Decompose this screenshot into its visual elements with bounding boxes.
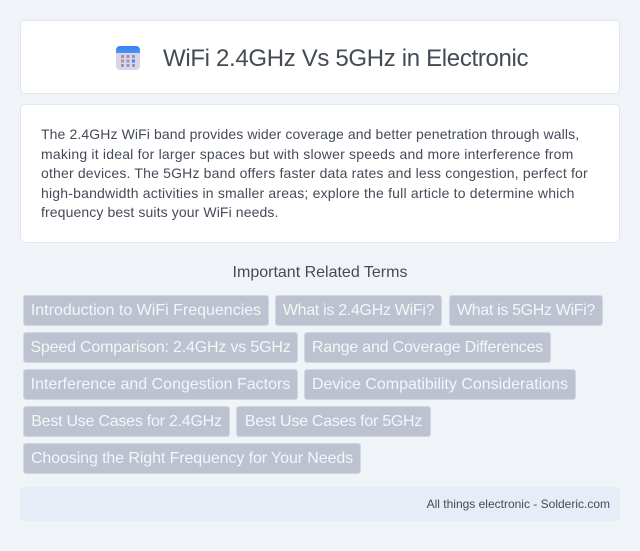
tag: [23, 295, 269, 326]
tag list: [23, 295, 603, 474]
tag: Interference and Congestion Factors: [31, 376, 290, 393]
title: WiFi 2.4GHz Vs 5GHz in Electronic: [163, 45, 528, 72]
heading: related terms: Important Related Terms: [233, 264, 407, 281]
description text: high-bandwidth activities in smaller areas; explore the full article to determine which: [41, 184, 575, 200]
tag: [23, 369, 298, 400]
footer credit: All things electronic - Solderic.com: [427, 497, 610, 511]
tag: What is 2.4GHz WiFi?: [283, 302, 434, 319]
description text: other devices. The 5GHz band offers faster data rates and less congestion, perfect for: [41, 165, 588, 181]
description text: The 2.4GHz WiFi band provides wider coverage and better penetration through walls,: [41, 126, 579, 142]
tag: [23, 406, 230, 437]
tag: Best Use Cases for 2.4GHz: [31, 413, 222, 430]
icon: calendar grid: [116, 46, 140, 70]
tag: [304, 369, 576, 400]
description text: [41, 126, 588, 220]
tag: Device Compatibility Considerations: [312, 376, 568, 393]
title panel: [20, 20, 620, 94]
tag: Speed Comparison: 2.4GHz vs 5GHz: [30, 339, 291, 356]
tag: [23, 332, 298, 363]
tag: [304, 332, 551, 363]
panel: description: [20, 104, 620, 243]
tag: [236, 406, 431, 437]
tag: Best Use Cases for 5GHz: [245, 413, 422, 430]
tag: Range and Coverage Differences: [312, 339, 543, 356]
tag: [23, 443, 361, 474]
tag: [449, 295, 603, 326]
footer bar: [20, 487, 620, 521]
tag: Choosing the Right Frequency for Your Needs: [31, 450, 353, 467]
description text: frequency best suits your WiFi needs.: [41, 204, 279, 220]
description text: making it ideal for larger spaces but with slower speeds and more interference from: [41, 146, 574, 162]
tag: What is 5GHz WiFi?: [457, 302, 595, 319]
tag: [275, 295, 442, 326]
tag: Introduction to WiFi Frequencies: [31, 302, 261, 319]
